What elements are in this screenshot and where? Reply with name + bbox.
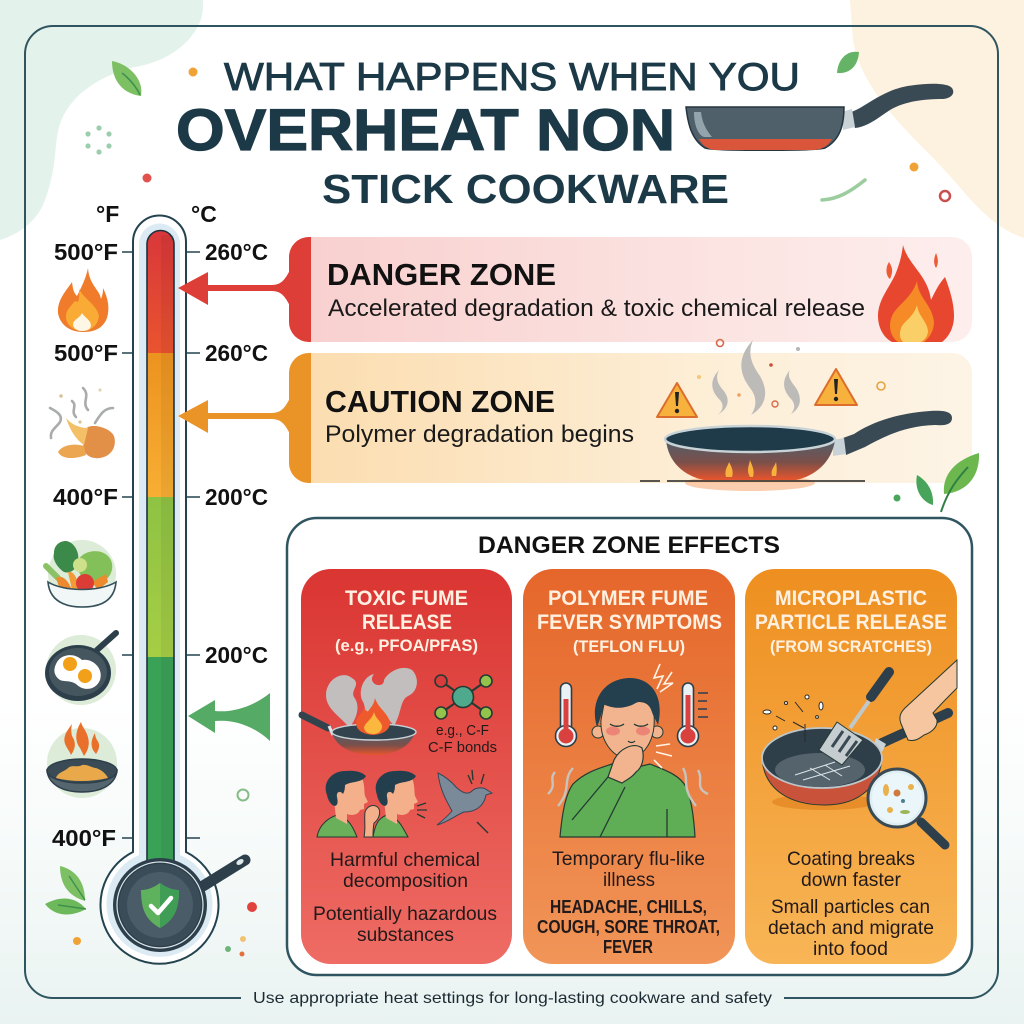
accent bar: caution: [289, 353, 311, 483]
icon: stir-fry pan: [47, 722, 117, 798]
text: caution zone description: Polymer degradation begins: [325, 421, 634, 448]
label: molecule bonds: e.g., C-F: [436, 722, 489, 739]
icon: smoking pan: [302, 668, 417, 755]
card title: RELEASE: [362, 611, 452, 634]
text: body: Potentially hazardous: [313, 903, 497, 925]
sparks: [697, 340, 885, 407]
icon: distressed bird: [437, 770, 492, 833]
title: [176, 56, 800, 212]
card: microplastic particle release: [745, 569, 957, 964]
icon: title pan: [686, 84, 953, 150]
text: body: into food: [813, 938, 888, 960]
icon: large flame: [878, 245, 954, 342]
temperature labels: 400°F: [53, 484, 118, 510]
card: toxic fume release: [301, 569, 512, 964]
text: symptoms: [537, 897, 720, 957]
text: body: [768, 848, 934, 960]
text: body: decomposition: [343, 870, 468, 892]
second person: [373, 771, 418, 837]
icon: coughing people: [317, 771, 427, 837]
text: body: Harmful chemical: [330, 849, 480, 871]
panel: caution zone: [178, 340, 972, 491]
text: body: Temporary flu-like: [552, 848, 705, 870]
heading: danger zone: DANGER ZONE: [327, 257, 556, 292]
thermometer: [52, 201, 268, 964]
icon: flame: [58, 268, 108, 332]
heading: caution zone: CAUTION ZONE: [325, 384, 555, 419]
accent bar: danger: [289, 237, 311, 342]
icon: warning triangle right: [815, 369, 857, 405]
text: danger zone description: Accelerated degradation & toxic chemical release: [328, 295, 865, 322]
icon: caution pan: [640, 411, 952, 491]
temperature labels: 400°F: [52, 825, 116, 851]
label: molecule bonds: [428, 722, 497, 756]
heading: danger zone effects: DANGER ZONE EFFECTS: [478, 532, 780, 559]
text: body: illness: [603, 869, 655, 891]
arrow: caution: [178, 396, 291, 436]
first person: [317, 771, 368, 837]
icon: hand: [900, 660, 957, 741]
footer note: Use appropriate heat settings for long-lasting cookware and safety: [253, 990, 772, 1007]
fluid column: [147, 230, 174, 867]
icon: spatula: [819, 672, 889, 765]
arrow: safe zone: [188, 693, 270, 741]
text: body: Coating breaks: [787, 848, 915, 870]
panel: danger zone effects: [287, 518, 972, 975]
text: symptoms: HEADACHE, CHILLS,: [550, 897, 707, 917]
text: body: detach and migrate: [768, 917, 934, 939]
text: symptoms: FEVER: [603, 937, 653, 957]
icon: pan in bulb with shield: [113, 858, 245, 952]
text: symptoms: COUGH, SORE THROAT,: [537, 917, 720, 937]
title: STICK COOKWARE: [322, 166, 729, 212]
icon: scratched pan: [762, 713, 948, 810]
card title: [755, 587, 947, 656]
card title: (FROM SCRATCHES): [770, 637, 932, 656]
text: body: substances: [357, 924, 454, 946]
icon: left thermometer: [556, 683, 576, 746]
card title: FEVER SYMPTOMS: [537, 611, 722, 634]
icon: burnt food with fumes: [50, 388, 115, 458]
icon: salad bowl: [46, 540, 116, 608]
card title: PARTICLE RELEASE: [755, 611, 947, 634]
card title: (TEFLON FLU): [573, 637, 685, 656]
temperature labels: [52, 239, 268, 851]
icon: fried egg pan: [45, 633, 116, 705]
card title: (e.g., PFOA/PFAS): [335, 636, 478, 655]
icon: molecule: [435, 675, 492, 719]
card title: TOXIC FUME: [345, 587, 468, 610]
text: body: [313, 849, 497, 946]
coughing fist: [364, 806, 380, 837]
temperature labels: 260°C: [205, 239, 268, 265]
leaves beside caution panel: [894, 453, 979, 512]
title: OVERHEAT NON: [176, 98, 675, 163]
card title: MICROPLASTIC: [775, 587, 927, 610]
smoke wisps: [712, 340, 800, 415]
icon: right thermometer: [678, 683, 708, 746]
title: WHAT HAPPENS WHEN YOU: [224, 56, 800, 99]
icon: warning triangle left: [657, 383, 697, 417]
temperature labels: 200°C: [205, 484, 268, 510]
tube inner glass: [106, 224, 213, 957]
temperature labels: 200°C: [205, 642, 268, 668]
panel: danger zone: [178, 237, 972, 342]
particles: [763, 695, 823, 742]
temperature labels: 260°C: [205, 340, 268, 366]
unit headers: [96, 201, 217, 227]
text: body: [552, 848, 705, 891]
decorative leaves and dots: [45, 52, 950, 957]
label: molecule bonds: C-F bonds: [428, 739, 497, 756]
arrow: danger: [178, 268, 291, 308]
card title: [335, 587, 478, 655]
card title: POLYMER FUME: [548, 587, 708, 610]
tick marks: [122, 252, 200, 838]
text: body: Small particles can: [771, 896, 930, 918]
card title: [537, 587, 722, 656]
unit headers: °C: [191, 201, 217, 227]
temperature labels: 500°F: [54, 340, 118, 366]
temperature labels: 500°F: [54, 239, 118, 265]
icon: sick person coughing: [548, 664, 708, 837]
text: body: down faster: [801, 869, 901, 891]
unit headers: °F: [96, 201, 119, 227]
card: polymer fume fever: [523, 569, 735, 964]
thermometer tube: [100, 216, 218, 964]
icon: magnifying glass: [868, 769, 945, 845]
